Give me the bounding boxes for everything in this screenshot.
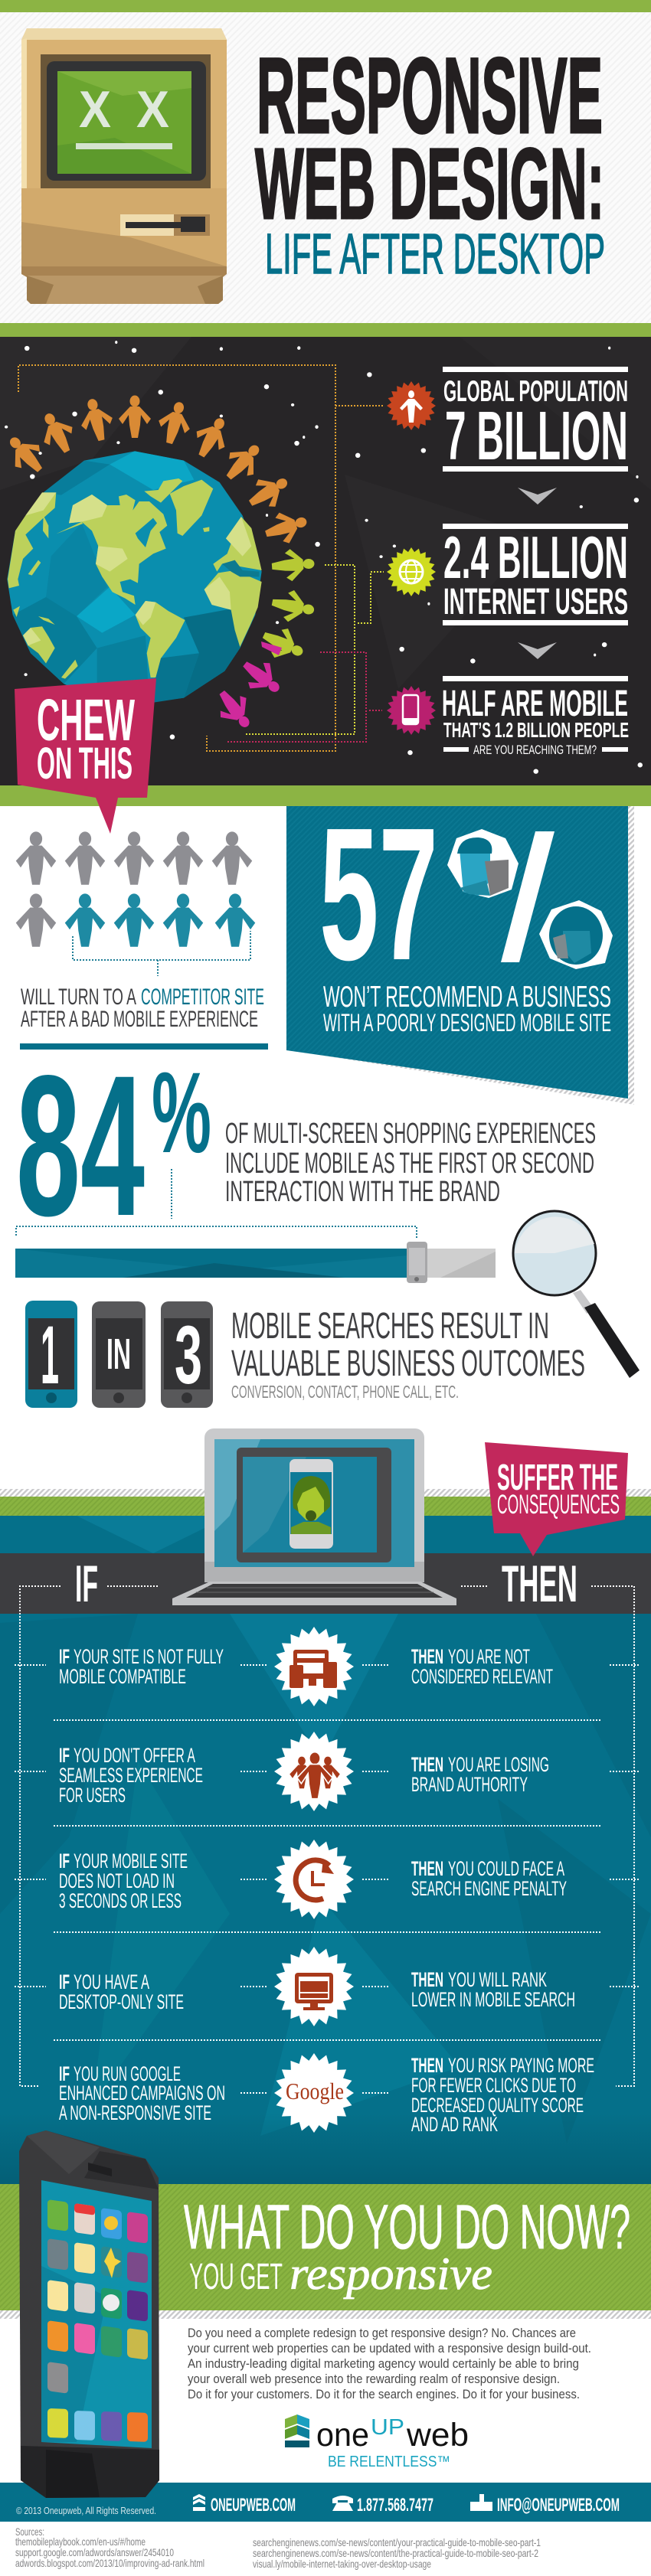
heading xyxy=(184,2192,630,2299)
callout: chew on this: ON THIS xyxy=(37,739,132,788)
row: seamless experience: IF xyxy=(59,1744,70,1767)
body copy: your overall web presence into the rewarding realm of responsive design. xyxy=(188,2372,560,2386)
row: not mobile compatible xyxy=(59,1627,553,1706)
logo: UP xyxy=(371,2415,404,2440)
contact: website: ONEUPWEB.COM xyxy=(211,2495,296,2516)
row: google enhanced campaigns: AND AD RANK xyxy=(411,2113,498,2136)
57 percent text xyxy=(323,981,611,1037)
row: not mobile compatible: YOU ARE NOT xyxy=(448,1645,530,1668)
panel: 84 percent xyxy=(15,1033,596,1283)
row: load in 3 seconds: 3 SECONDS OR LESS xyxy=(59,1889,182,1912)
logo: web xyxy=(406,2417,469,2454)
row: google enhanced campaigns: A NON-RESPONSIVE SITE xyxy=(59,2101,211,2124)
row: load in 3 seconds: THEN xyxy=(411,1857,443,1880)
callout: chew on this xyxy=(15,678,156,834)
panel: 1 in 3 xyxy=(25,1301,585,1408)
row: google enhanced campaigns: YOU RUN GOOGLE xyxy=(74,2062,181,2085)
heading: responsive xyxy=(290,2248,492,2299)
stat: global population xyxy=(387,367,628,475)
row dividers xyxy=(15,1665,640,2093)
arrow xyxy=(518,642,557,659)
competitor text: WILL TURN TO A xyxy=(21,984,136,1010)
row: seamless experience: BRAND AUTHORITY xyxy=(411,1773,528,1796)
row: desktop only: IF xyxy=(59,1970,70,1993)
row: desktop only xyxy=(59,1947,575,2026)
callout: chew on this: CHEW xyxy=(37,687,135,753)
arrow xyxy=(518,488,557,504)
phone with face xyxy=(290,1459,333,1549)
title xyxy=(255,35,605,286)
competitor text: AFTER A BAD MOBILE EXPERIENCE xyxy=(21,1007,258,1032)
icon: logo stack xyxy=(285,2414,309,2447)
sources: themobileplaybook.com/en-us/#/home xyxy=(15,2535,146,2548)
icon: laptop with tablet and phone xyxy=(172,1428,456,1605)
row: seamless experience: YOU ARE LOSING xyxy=(448,1753,549,1776)
row: load in 3 seconds: IF xyxy=(59,1850,70,1872)
heading: if then: THEN xyxy=(502,1555,577,1613)
phone screen xyxy=(41,2180,152,2448)
panel: competitor stat xyxy=(16,831,268,1050)
row: seamless experience: FOR USERS xyxy=(59,1784,126,1807)
sources: searchenginenews.com/se-news/content/the-practical-guide-to-mobile-seo-part-2 xyxy=(253,2547,538,2559)
row: not mobile compatible: MOBILE COMPATIBLE xyxy=(59,1665,186,1688)
row: desktop only: YOU HAVE A xyxy=(74,1970,149,1993)
row: google enhanced campaigns: IF xyxy=(59,2062,70,2085)
screen face xyxy=(76,80,172,149)
sources: support.google.com/adwords/answer/2454010 xyxy=(15,2546,174,2558)
sources: Sources: xyxy=(15,2525,44,2538)
row: load in 3 seconds: YOUR MOBILE SITE xyxy=(74,1850,188,1872)
callout: suffer the consequences xyxy=(485,1442,628,1556)
logo xyxy=(285,2414,469,2470)
body copy: Do it for your customers. Do it for the search engines. Do it for your business. xyxy=(188,2387,580,2401)
icon: large smartphone xyxy=(19,2130,159,2498)
screen face: X xyxy=(136,80,169,139)
icon: retro computer xyxy=(21,28,227,304)
stat: half are mobile: ARE YOU REACHING THEM? xyxy=(473,743,597,757)
stat: half are mobile xyxy=(387,676,629,757)
screen face: X xyxy=(79,80,111,139)
sources: searchenginenews.com/se-news/content/your-practical-guide-to-mobile-seo-part-1 xyxy=(253,2536,541,2548)
phones: 1 xyxy=(41,1308,59,1401)
people ring xyxy=(0,395,317,736)
keyboard xyxy=(172,1582,456,1605)
icon: clock arrow xyxy=(296,1859,334,1900)
stars xyxy=(5,341,643,774)
icon: woman with phone xyxy=(539,900,613,969)
competitor text: COMPETITOR SITE xyxy=(141,984,264,1010)
contact: email xyxy=(470,2494,620,2516)
panel: global population xyxy=(0,337,651,834)
icon: monitor xyxy=(295,1973,333,2010)
row: not mobile compatible: THEN xyxy=(411,1645,443,1668)
phones: 3 xyxy=(175,1308,202,1401)
icon: devices xyxy=(290,1650,337,1688)
heading: if then xyxy=(20,1555,634,2086)
row: seamless experience xyxy=(59,1732,549,1811)
row: desktop only: THEN xyxy=(411,1968,443,1991)
heading: if then: IF xyxy=(75,1555,98,1613)
row: load in 3 seconds: YOU COULD FACE A xyxy=(448,1857,564,1880)
row: google enhanced campaigns: THEN xyxy=(411,2054,443,2077)
sources xyxy=(15,2525,541,2570)
row: desktop only: DESKTOP-ONLY SITE xyxy=(59,1990,184,2013)
header panel xyxy=(0,0,651,337)
big number: 57 xyxy=(319,788,438,1000)
icon: man with phone xyxy=(447,829,519,898)
body copy: An industry-leading digital marketing agency would certainly be able to bring xyxy=(188,2356,579,2371)
panel: consequences background xyxy=(0,1489,651,2184)
row: google enhanced campaigns: ENHANCED CAMPAIGNS ON xyxy=(59,2081,225,2104)
row: not mobile compatible: YOUR SITE IS NOT FULLY xyxy=(74,1645,224,1668)
contact: phone: 1.877.568.7477 xyxy=(357,2495,433,2516)
row: google enhanced campaigns xyxy=(59,2053,594,2136)
panel: what do you do now xyxy=(0,2184,651,2401)
icon: magnifying glass xyxy=(513,1211,640,1378)
progress bar xyxy=(15,1242,496,1283)
84 percent text xyxy=(225,1118,596,1208)
heading: YOU GET xyxy=(189,2257,283,2297)
phones xyxy=(25,1301,213,1408)
row: seamless experience: YOU DON'T OFFER A xyxy=(74,1744,195,1767)
row: seamless experience: SEAMLESS EXPERIENCE xyxy=(59,1764,203,1787)
icon: google wordmark: Google xyxy=(286,2078,344,2104)
1 in 3 text: CONVERSION, CONTACT, PHONE CALL, ETC. xyxy=(231,1382,459,1402)
footer bar: © 2013 Oneupweb, All Rights Reserved. xyxy=(16,2505,156,2516)
sources: visual.ly/mobile-internet-taking-over-desktop-usage xyxy=(253,2558,431,2570)
dotted connectors xyxy=(18,365,384,751)
globe xyxy=(7,451,262,703)
big number: % xyxy=(152,1048,211,1177)
row: load in 3 seconds: DOES NOT LOAD IN xyxy=(59,1869,175,1892)
contact: website xyxy=(193,2494,296,2516)
contact: phone xyxy=(332,2495,433,2516)
icon: three people xyxy=(290,1752,340,1799)
1 in 3 text xyxy=(231,1306,585,1402)
sources: adwords.blogspot.com/2013/10/improving-ad-rank.html xyxy=(15,2557,204,2569)
phones: IN xyxy=(106,1330,131,1379)
panel: 57 percent xyxy=(286,788,634,1105)
logo: BE RELENTLESS™ xyxy=(328,2454,450,2470)
big number: 84 xyxy=(16,1033,146,1258)
stat: internet users xyxy=(387,524,628,625)
body copy: your current web properties can be updated with a responsive design build-out. xyxy=(188,2341,591,2356)
body copy xyxy=(188,2326,591,2401)
body copy: Do you need a complete redesign to get responsive design? No. Chances are xyxy=(188,2326,576,2340)
footer bar xyxy=(0,2483,651,2522)
row: not mobile compatible: IF xyxy=(59,1645,70,1668)
app icons xyxy=(47,2199,148,2442)
row: seamless experience: THEN xyxy=(411,1753,443,1776)
row: load in 3 seconds xyxy=(59,1840,567,1919)
row: desktop only: YOU WILL RANK xyxy=(448,1968,547,1991)
competitor text xyxy=(21,984,264,1032)
green band xyxy=(0,785,651,806)
logo: one xyxy=(316,2417,369,2454)
continents xyxy=(8,478,262,679)
people grid xyxy=(16,831,255,947)
